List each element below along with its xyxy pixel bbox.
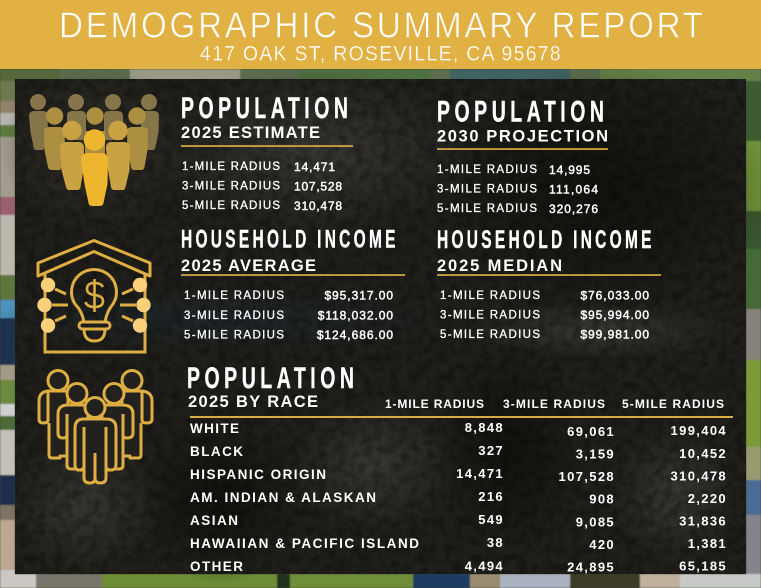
stats: population 2025: 14,471 — [294, 160, 335, 174]
row: black: BLACK — [190, 444, 243, 459]
row: hawaiian and pacific island — [190, 535, 727, 552]
heading: household income median: HOUSEHOLD INCOME — [437, 226, 652, 254]
stats: average income: 5-MILE RADIUS — [184, 330, 284, 342]
row: white: 199,404 — [671, 423, 727, 438]
row: hispanic origin: 107,528 — [559, 469, 615, 484]
race table — [190, 420, 727, 574]
heading: population 2025 by race: 2025 BY RACE — [188, 393, 318, 411]
row: american indian and alaskan: 908 — [589, 492, 615, 506]
stats: population 2025: 107,528 — [294, 180, 342, 194]
heading: population 2025 estimate: POPULATION — [181, 92, 348, 125]
table column headers: 3-MILE RADIUS — [503, 397, 605, 411]
row: hawaiian and pacific island: 1,381 — [688, 536, 727, 551]
icon: house with lightbulb and dollar sign — [37, 240, 151, 352]
stats: median income: $95,994.00 — [580, 308, 650, 322]
heading: population 2030 projection — [437, 96, 608, 150]
stats: population 2030: 14,995 — [549, 163, 590, 177]
row: black: 3,159 — [576, 446, 615, 462]
table column headers: 1-MILE RADIUS — [385, 397, 484, 411]
heading: population 2025 by race: POPULATION — [187, 362, 354, 395]
row: hispanic origin: HISPANIC ORIGIN — [190, 467, 326, 482]
heading: population 2030 projection: 2030 PROJECTION — [437, 128, 608, 146]
stats: population 2030: 320,276 — [549, 202, 598, 216]
row: asian — [190, 512, 727, 530]
row: asian: ASIAN — [190, 513, 238, 528]
row: hawaiian and pacific island: 420 — [589, 537, 615, 552]
row: american indian and alaskan: AM. INDIAN & ALASKAN — [190, 490, 376, 505]
stats: median income: $99,981.00 — [580, 328, 650, 342]
heading: household income average — [181, 226, 405, 276]
stats: average income: 1-MILE RADIUS — [184, 290, 284, 302]
title: DEMOGRAPHIC SUMMARY REPORT — [59, 6, 703, 46]
row: black: 10,452 — [679, 446, 727, 461]
row: hispanic origin — [190, 466, 727, 484]
stats: population 2025: 5-MILE RADIUS — [182, 200, 280, 212]
row: hispanic origin: 310,478 — [671, 468, 727, 484]
stats: median income: 3-MILE RADIUS — [440, 310, 540, 322]
header band — [0, 0, 761, 69]
icon detail: dollar sign — [86, 279, 103, 312]
stats: median income: 5-MILE RADIUS — [440, 329, 540, 341]
row: asian: 549 — [478, 512, 504, 527]
row: hawaiian and pacific island: 38 — [487, 535, 504, 550]
icon: group of five outlined people — [39, 370, 152, 483]
row: asian: 9,085 — [576, 514, 615, 530]
stats: population 2030: 1-MILE RADIUS — [437, 164, 537, 176]
stats: median income: $76,033.00 — [580, 288, 650, 302]
stats: population 2025: 1-MILE RADIUS — [182, 161, 280, 173]
row: other: OTHER — [190, 559, 243, 574]
row: other: 4,494 — [465, 558, 504, 574]
stats: population 2030 — [437, 163, 598, 216]
table column headers — [190, 397, 733, 418]
address subtitle: 417 OAK ST, ROSEVILLE, CA 95678 — [200, 43, 561, 66]
row: white: WHITE — [190, 421, 239, 436]
row: american indian and alaskan: 216 — [478, 489, 504, 504]
stats: population 2025: 310,478 — [294, 199, 342, 213]
heading: population 2025 estimate — [181, 92, 353, 147]
row: hawaiian and pacific island: HAWAIIAN & PACIFIC ISLAND — [190, 536, 419, 551]
stats: median income — [440, 288, 650, 342]
stats: median income: 1-MILE RADIUS — [440, 290, 540, 302]
stats: population 2030: 3-MILE RADIUS — [437, 184, 537, 196]
stats: average income — [184, 288, 394, 342]
heading: household income average: HOUSEHOLD INCOME — [181, 226, 396, 254]
heading: household income average: 2025 AVERAGE — [181, 257, 316, 275]
stats: average income: 3-MILE RADIUS — [184, 310, 284, 322]
heading: household income median — [437, 226, 661, 276]
stats: population 2030: 5-MILE RADIUS — [437, 203, 537, 215]
heading: population 2030 projection: POPULATION — [437, 96, 604, 129]
row: black: 327 — [478, 443, 504, 458]
row: white — [190, 420, 727, 439]
stats: population 2025: 3-MILE RADIUS — [182, 180, 280, 192]
stats: population 2030: 111,064 — [549, 182, 598, 196]
row: black — [190, 443, 727, 462]
table column headers: 5-MILE RADIUS — [622, 397, 724, 411]
heading: population 2025 by race — [187, 362, 354, 411]
stats: average income: $118,032.00 — [318, 308, 394, 322]
row: hispanic origin: 14,471 — [456, 466, 504, 481]
row: white: 69,061 — [567, 424, 615, 439]
stats: average income: $124,686.00 — [317, 328, 394, 342]
row: white: 8,848 — [465, 420, 504, 435]
icon detail: connector dots — [37, 278, 151, 333]
heading: population 2025 estimate: 2025 ESTIMATE — [181, 124, 320, 142]
heading: household income median: 2025 MEDIAN — [437, 257, 562, 275]
row: other: 24,895 — [567, 560, 615, 574]
stats: average income: $95,317.00 — [324, 288, 394, 302]
icon: crowd of people — [29, 94, 159, 206]
row: other: 65,185 — [679, 558, 727, 574]
row: other — [190, 558, 727, 574]
stats: population 2025 — [182, 160, 342, 213]
row: american indian and alaskan: 2,220 — [688, 491, 727, 506]
row: american indian and alaskan — [190, 489, 727, 506]
row: asian: 31,836 — [679, 514, 727, 528]
